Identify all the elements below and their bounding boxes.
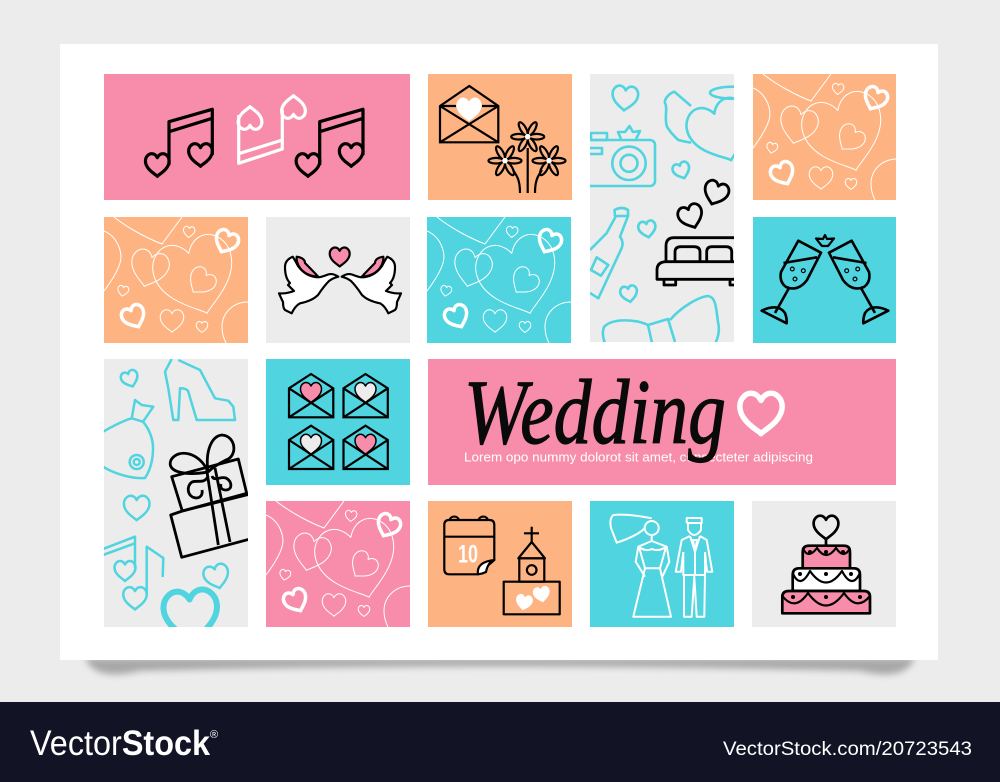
panel: envelope and flowers bbox=[428, 74, 572, 200]
panel: four envelopes bbox=[266, 359, 410, 485]
icon: bed bbox=[657, 238, 740, 285]
icon: cake bbox=[782, 516, 870, 613]
panel: heart pattern cyan bbox=[427, 217, 571, 343]
icon: white note bbox=[238, 96, 305, 163]
watermark url: VectorStock.com/20723543 bbox=[723, 739, 972, 760]
white card bbox=[60, 44, 938, 660]
card shadow bbox=[85, 658, 915, 674]
icon: envelope grey bottom left bbox=[289, 426, 333, 469]
panel: tall grey with shoe and gift bbox=[103, 359, 250, 644]
icon: envelope pink bottom right bbox=[344, 426, 388, 469]
icon: black note left bbox=[145, 109, 212, 176]
icon: right dove bbox=[342, 257, 401, 313]
icon: flowers bbox=[488, 121, 566, 193]
panel: heart pattern orange bbox=[104, 217, 248, 343]
icons: cyan line pattern bbox=[103, 359, 235, 644]
panel: heart pattern pink bbox=[266, 501, 410, 627]
panel: cake bbox=[752, 501, 896, 627]
panel: title bbox=[428, 359, 896, 485]
icon: pink heart bbox=[330, 248, 350, 266]
subtitle: Lorem opo nummy dolorot sit amet, consecteter adipiscing bbox=[464, 450, 813, 464]
icon: hearts above bed bbox=[676, 178, 731, 232]
icon: church bbox=[504, 527, 560, 614]
panel: music notes bbox=[104, 74, 410, 200]
panel: calendar and church bbox=[428, 501, 572, 627]
icon: black note right bbox=[296, 109, 363, 176]
panel: bride and groom bbox=[590, 501, 734, 627]
watermark logo: VectorStock bbox=[30, 724, 210, 763]
icons: cyan line pattern bbox=[590, 84, 734, 342]
panel: heart pattern top right bbox=[753, 74, 897, 200]
icon: left dove bbox=[279, 257, 338, 313]
registered mark: ® bbox=[210, 729, 218, 741]
panel: champagne glasses bbox=[753, 217, 896, 343]
icon: envelope pink top left bbox=[289, 374, 333, 417]
icon: white heart bbox=[740, 393, 782, 434]
icon: groom bbox=[676, 518, 712, 617]
icon: right glass bbox=[829, 241, 888, 323]
date number: 10 bbox=[458, 540, 478, 568]
icon: gift box bbox=[170, 435, 250, 557]
title text: Wedding bbox=[464, 361, 726, 463]
icon: bride bbox=[610, 515, 671, 617]
panel: doves bbox=[266, 217, 410, 343]
icon: envelope grey top right bbox=[344, 374, 388, 417]
icon: left glass bbox=[762, 241, 821, 323]
panel: tall grey with camera and bed bbox=[590, 74, 734, 342]
footer banner bbox=[0, 702, 1000, 782]
icon: calendar bbox=[444, 517, 494, 574]
icon: sparkle bbox=[816, 235, 834, 246]
icon: envelope with heart bbox=[440, 86, 498, 142]
